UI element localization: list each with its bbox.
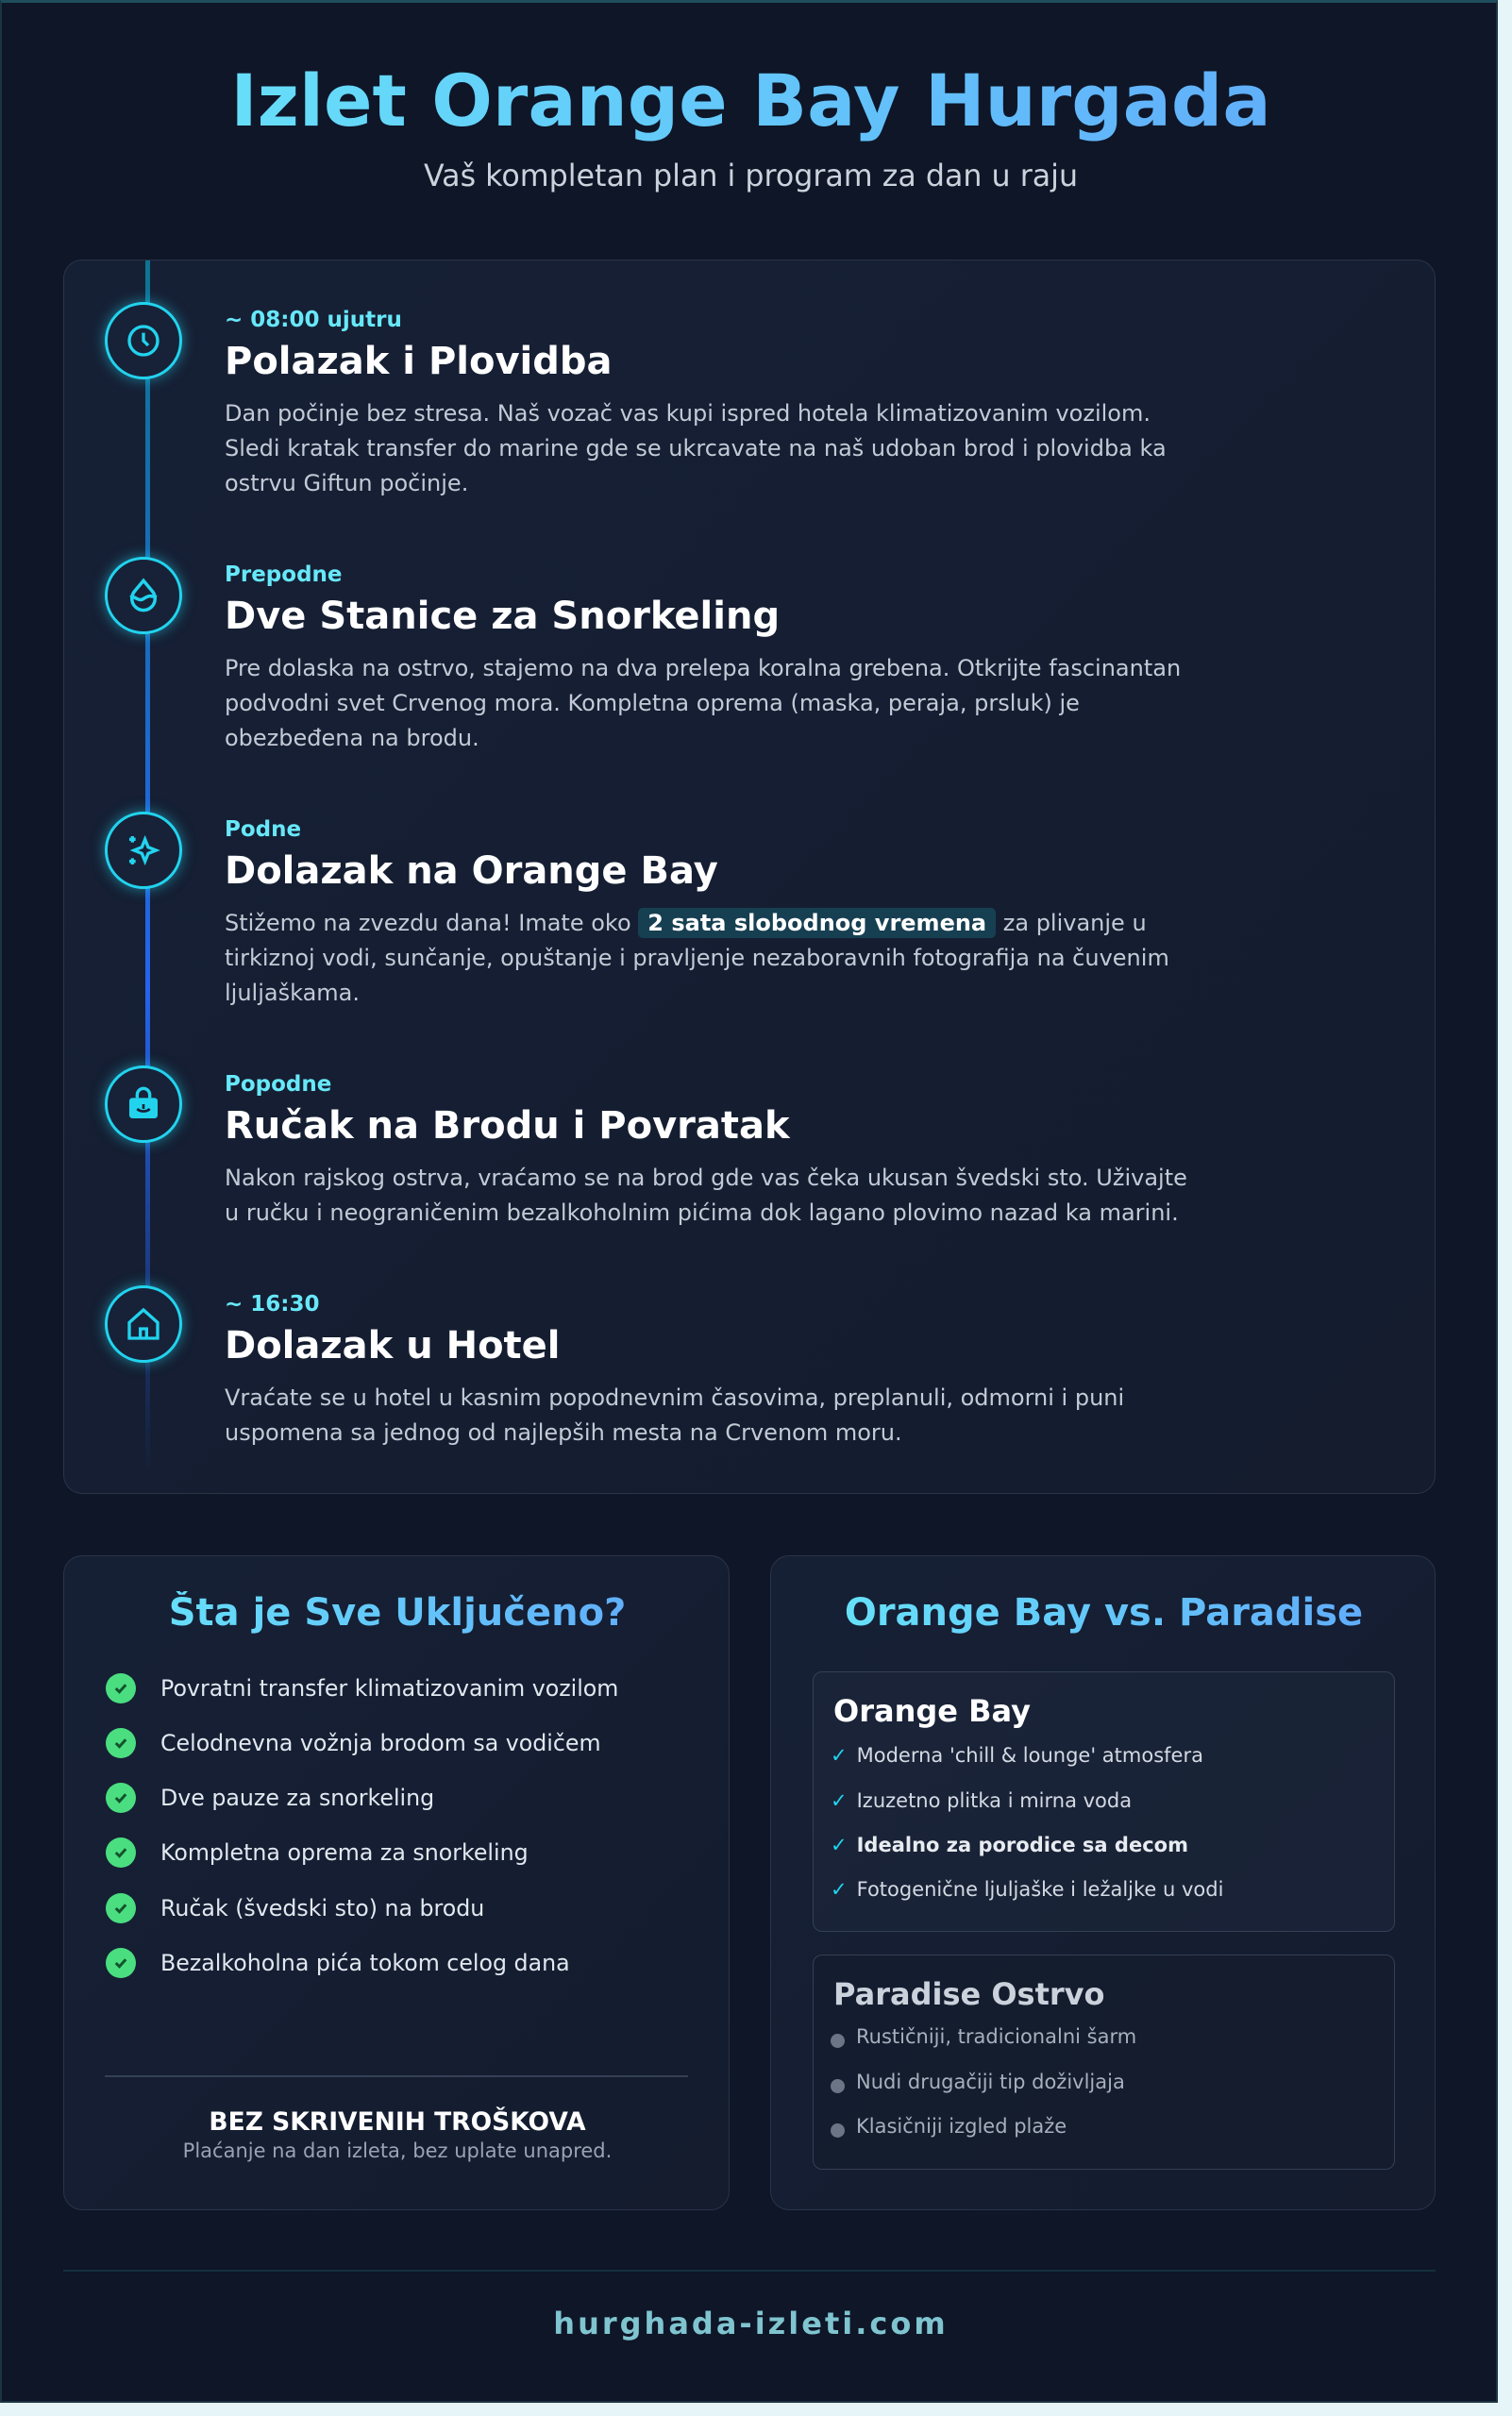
- step 4: Ručak na Brodu i Povratak: [225, 1104, 790, 1148]
- panel: comparison: [770, 1555, 1436, 2210]
- step 5: [225, 1292, 1124, 1446]
- box: Orange Bay: ✓: [831, 1834, 848, 1856]
- panel: included: [63, 1555, 730, 2210]
- step 5: Vraćate se u hotel u kasnim popodnevnim časovima, preplanuli, odmorni i puni uspomena sa jednog od najlepših mesta na Crvenom moru.: [225, 1384, 1124, 1446]
- subtitle: Vaš kompletan plan i program za dan u raju: [424, 159, 1078, 193]
- step 1: ~ 08:00 ujutru: [225, 308, 402, 332]
- icon: home: [105, 1285, 182, 1363]
- note: no hidden costs: Plaćanje na dan izleta, bez uplate unapred.: [183, 2139, 612, 2162]
- note: no hidden costs: [183, 2106, 612, 2162]
- icon: clock: [105, 302, 182, 379]
- box: Orange Bay: Izuzetno plitka i mirna voda: [857, 1789, 1132, 1812]
- icon: water drop: [105, 557, 182, 634]
- note: no hidden costs: BEZ SKRIVENIH TROŠKOVA: [209, 2107, 586, 2137]
- box: Orange Bay: Moderna 'chill & lounge' atmosfera: [857, 1744, 1203, 1767]
- step 4: Popodne: [225, 1072, 331, 1097]
- step 1: Polazak i Plovidba: [225, 340, 612, 383]
- icon: bag: [105, 1065, 182, 1143]
- list: Kompletna oprema za snorkeling: [160, 1839, 529, 1866]
- box: Paradise: Paradise Ostrvo: [833, 1976, 1104, 2012]
- list: Celodnevna vožnja brodom sa vodičem: [160, 1730, 601, 1756]
- title: Izlet Orange Bay Hurgada: [230, 59, 1271, 143]
- box: Paradise: Nudi drugačiji tip doživljaja: [856, 2071, 1125, 2093]
- step 3: Podne: [225, 817, 301, 842]
- box: Paradise: Klasičniji izgled plaže: [856, 2115, 1067, 2138]
- heading: [64, 1591, 731, 1635]
- step 2: Prepodne: [225, 562, 343, 587]
- step 3: [225, 817, 1169, 1006]
- list: [106, 1673, 618, 1978]
- footer: hurghada-izleti.com: [553, 2306, 949, 2341]
- step 2: Dve Stanice za Snorkeling: [225, 595, 780, 638]
- timeline line: [145, 260, 150, 1478]
- box: Paradise: Rustičniji, tradicionalni šarm: [856, 2025, 1136, 2048]
- step 5: ~ 16:30: [225, 1292, 319, 1317]
- heading: Šta je Sve Uključeno?: [169, 1591, 626, 1635]
- step 4: Nakon rajskog ostrva, vraćamo se na brod gde vas čeka ukusan švedski sto. Uživajte u ručku i neograničenim bezalkoholnim pićima dok lagano plovimo nazad ka marini.: [225, 1165, 1187, 1226]
- step 1: [225, 308, 1167, 496]
- panel: timeline: [63, 260, 1436, 1494]
- step 2: Pre dolaska na ostrvo, stajemo na dva prelepa koralna grebena. Otkrijte fascinantan podvodni svet Crvenog mora. Kompletna oprema (maska, peraja, prsluk) je obezbeđena na brodu.: [225, 655, 1181, 751]
- list: Ručak (švedski sto) na brodu: [160, 1895, 484, 1921]
- step 2: [225, 562, 1181, 751]
- list: Bezalkoholna pića tokom celog dana: [160, 1950, 570, 1976]
- list: Dve pauze za snorkeling: [160, 1785, 434, 1811]
- icon: sparkles: [105, 812, 182, 889]
- box: Paradise: [813, 1955, 1395, 2170]
- heading: Orange Bay vs. Paradise: [845, 1591, 1363, 1635]
- box: Orange Bay: Fotogenične ljuljaške i ležaljke u vodi: [857, 1878, 1223, 1901]
- box: Orange Bay: ✓: [831, 1744, 848, 1767]
- box: Orange Bay: ✓: [831, 1789, 848, 1812]
- step 3: Stižemo na zvezdu dana! Imate oko 2 sata slobodnog vremena za plivanje u tirkiznoj vodi, sunčanje, opuštanje i pravljenje nezaboravnih fotografija na čuvenim ljuljaškama.: [225, 910, 1169, 1006]
- box: Orange Bay: [813, 1671, 1395, 1932]
- step 1: Dan počinje bez stresa. Naš vozač vas kupi ispred hotela klimatizovanim vozilom. Sledi kratak transfer do marine gde se ukrcavate na naš udoban brod i plovidba ka ostrvu Giftun počinje.: [225, 400, 1167, 496]
- step 5: Dolazak u Hotel: [225, 1324, 561, 1367]
- box: Orange Bay: ✓: [831, 1878, 848, 1901]
- box: Orange Bay: Idealno za porodice sa decom: [857, 1834, 1188, 1856]
- list: Povratni transfer klimatizovanim vozilom: [160, 1675, 618, 1702]
- box: Orange Bay: Orange Bay: [833, 1693, 1031, 1729]
- step 3: Dolazak na Orange Bay: [225, 849, 718, 893]
- title: [2, 54, 1500, 148]
- step 4: [225, 1072, 1187, 1226]
